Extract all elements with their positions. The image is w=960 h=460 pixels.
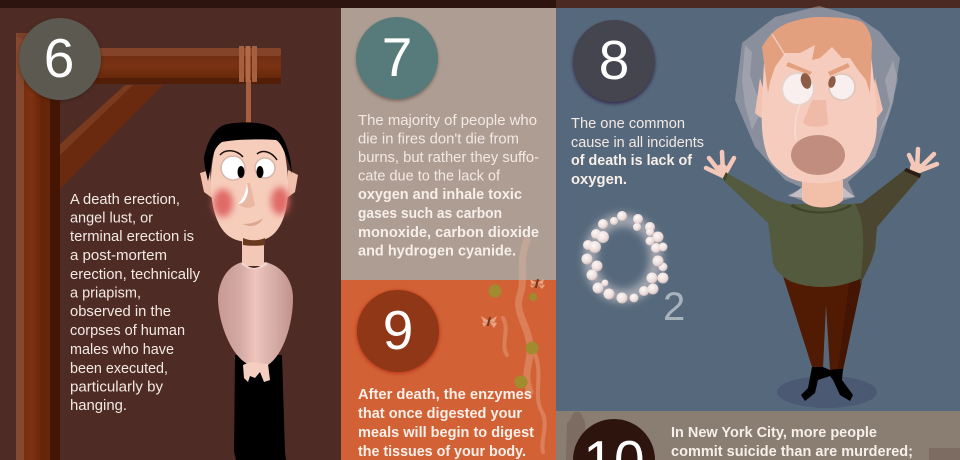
sweater bbox=[723, 168, 920, 287]
text: death erection: males who have bbox=[70, 342, 174, 358]
number badge 8 bbox=[573, 20, 655, 104]
face bbox=[762, 45, 877, 183]
text: suicide bbox=[671, 425, 913, 460]
plastic bag highlights bbox=[772, 34, 800, 140]
text: fires: monoxide, carbon dioxide bbox=[358, 225, 539, 241]
text: lack of oxygen: of death is lack of bbox=[571, 153, 692, 169]
trousers bbox=[783, 276, 863, 370]
text: enzymes bbox=[358, 387, 534, 460]
shoes bbox=[801, 367, 853, 401]
number badge 7: 7 bbox=[382, 26, 412, 88]
text: enzymes: meals will begin to digest bbox=[358, 425, 534, 441]
number badge 9: 9 bbox=[383, 299, 413, 361]
text: enzymes: the tissues of your body. bbox=[358, 444, 526, 460]
text: enzymes: After death, the enzymes bbox=[358, 387, 532, 403]
icon: O2 pearl ring: 2 bbox=[663, 285, 685, 329]
panel: fact 10 bbox=[556, 411, 960, 460]
ears bbox=[755, 78, 768, 118]
number badge 9 bbox=[356, 290, 440, 374]
panel: fact 8 bbox=[556, 6, 960, 411]
decoration: bubbles bbox=[488, 284, 538, 388]
panel: fact 7 bbox=[341, 8, 556, 280]
text: fires: die in fires don't die from bbox=[358, 132, 519, 148]
text: lack of oxygen: The one common bbox=[571, 116, 685, 132]
hands bbox=[706, 149, 937, 176]
number badge 10 bbox=[573, 419, 655, 460]
text: lack of oxygen: oxygen. bbox=[571, 172, 627, 188]
text: fires: and hydrogen cyanide. bbox=[358, 244, 516, 260]
text: death erection: been executed, bbox=[70, 361, 168, 377]
number badge 6 bbox=[19, 18, 101, 101]
text: enzymes: that once digested your bbox=[358, 406, 522, 422]
text: death erection: a post-mortem bbox=[70, 248, 167, 264]
icon: O2 pearl ring bbox=[582, 211, 685, 329]
hair bbox=[762, 17, 872, 93]
text: fires: oxygen and inhale toxic bbox=[358, 187, 522, 203]
text: lack of oxygen: cause in all incidents bbox=[571, 135, 704, 151]
decoration: flies bbox=[481, 279, 545, 328]
text: death erection: hanging. bbox=[70, 398, 127, 414]
gallows bbox=[16, 33, 281, 460]
plastic bag back bbox=[735, 6, 900, 203]
text: death erection: erection, technically bbox=[70, 267, 201, 283]
text: fires: gases such as carbon bbox=[358, 206, 502, 222]
panel: fact 6 bbox=[0, 8, 340, 460]
text: suicide: In New York City, more people bbox=[671, 425, 877, 441]
text: death erection: particularly by bbox=[70, 380, 164, 396]
number badge 8: 8 bbox=[599, 29, 629, 91]
decoration: smoke bbox=[503, 240, 545, 452]
figure: hanged man bbox=[200, 122, 298, 460]
text: suicide: commit suicide than are murdered; bbox=[671, 444, 913, 460]
text: fires: The majority of people who bbox=[358, 113, 537, 129]
text: lack of oxygen bbox=[571, 116, 704, 188]
text: death erection: a priapism, bbox=[70, 286, 141, 302]
text: fires: burns, but rather they suffo- bbox=[358, 150, 539, 166]
text: death erection: corpses of human bbox=[70, 323, 185, 339]
panel: fact 9 bbox=[341, 240, 556, 460]
text: death erection bbox=[70, 192, 201, 414]
text: death erection: A death erection, bbox=[70, 192, 180, 208]
panel: top bar bbox=[0, 0, 960, 8]
figure: man with plastic bag bbox=[706, 6, 937, 408]
rope bbox=[239, 46, 257, 124]
text: fires bbox=[358, 113, 539, 260]
number badge 6: 6 bbox=[44, 27, 74, 89]
decoration: skyline bbox=[566, 412, 960, 460]
text: death erection: terminal erection is bbox=[70, 229, 194, 245]
neck bbox=[802, 180, 843, 208]
text: fires: cate due to the lack of bbox=[358, 168, 501, 184]
number badge 7 bbox=[356, 17, 438, 101]
text: death erection: observed in the bbox=[70, 304, 171, 320]
text: death erection: angel lust, or bbox=[70, 210, 153, 226]
